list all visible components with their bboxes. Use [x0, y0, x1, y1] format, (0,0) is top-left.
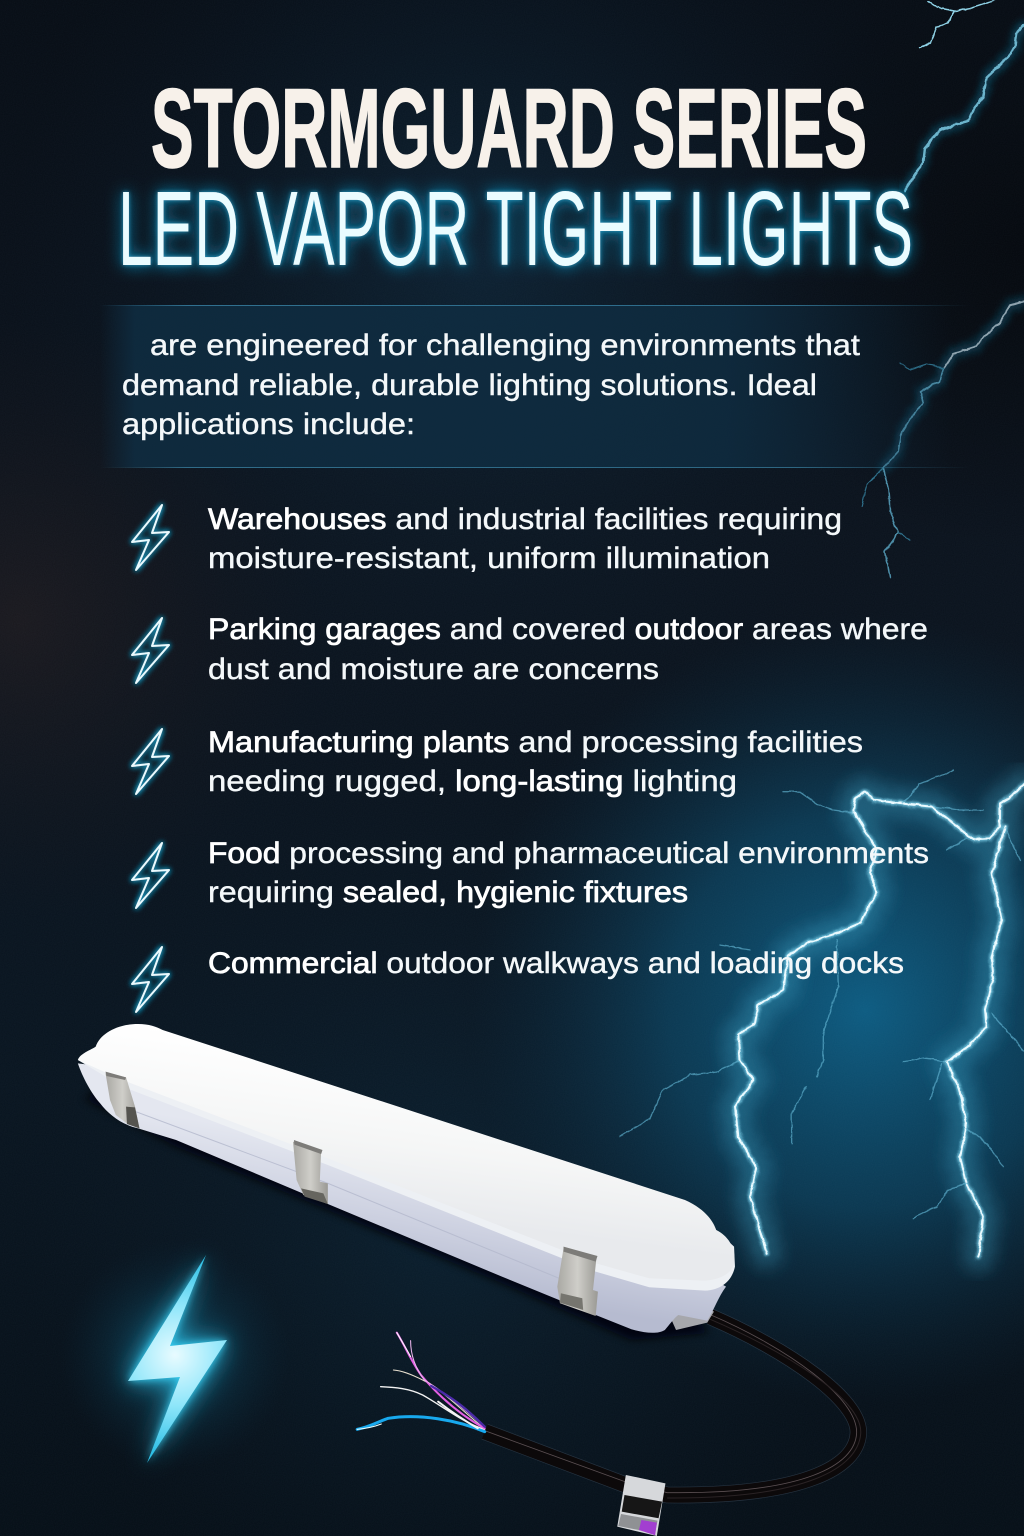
icon: neon bolt: [132, 947, 169, 1012]
item text: [208, 837, 929, 909]
clip: right: [557, 1247, 598, 1316]
housing: [78, 1063, 726, 1333]
item text: Manufacturing plants and processing facilities: [208, 726, 863, 759]
cable label: [617, 1475, 665, 1536]
lightning: middle right: [862, 302, 1024, 577]
clip: left: [106, 1072, 139, 1128]
item text: Warehouses and industrial facilities requiring: [208, 503, 842, 536]
item text: Commercial outdoor walkways and loading docks: [208, 947, 904, 980]
lightning: top right: [905, 0, 1024, 191]
icon: large glowing bolt: [60, 1240, 290, 1470]
item text: [208, 503, 842, 575]
item: parking: [132, 613, 928, 686]
intro text: applications include:: [122, 408, 415, 441]
icon: neon bolt: [132, 618, 169, 683]
item text: Food processing and pharmaceutical environments: [208, 837, 929, 870]
intro text: [122, 329, 861, 441]
lens rim: [78, 1043, 735, 1291]
list: applications: [132, 503, 929, 1012]
item: warehouses: [132, 503, 842, 575]
clip: center: [293, 1140, 328, 1204]
intro text: are engineered for challenging environments that: [150, 329, 861, 362]
icon: neon bolt: [132, 729, 169, 794]
item: manufacturing: [132, 726, 863, 798]
item text: requiring sealed, hygienic fixtures: [208, 876, 688, 909]
rear end bracket: [672, 1307, 714, 1330]
item text: moisture-resistant, uniform illumination: [208, 542, 770, 575]
housing ridge: [136, 1112, 596, 1293]
panel: intro: [100, 305, 970, 468]
cable: [485, 1315, 861, 1498]
cable and wires: [357, 1315, 861, 1536]
product: LED vapor tight light: [78, 1024, 735, 1340]
item text: [208, 613, 928, 686]
icon: neon bolt: [132, 505, 169, 570]
item text: dust and moisture are concerns: [208, 653, 659, 686]
item text: Parking garages and covered outdoor areas where: [208, 613, 928, 646]
intro text: demand reliable, durable lighting solutions. Ideal: [122, 369, 817, 402]
stripped wires: [357, 1333, 485, 1432]
item text: [208, 726, 863, 798]
title: [118, 66, 913, 288]
lightning: large strikes: [620, 770, 1024, 1257]
lens: [78, 1024, 734, 1281]
icon: neon bolt: [132, 843, 169, 908]
item: commercial: [132, 947, 904, 1012]
item: food: [132, 837, 929, 909]
item text: needing rugged, long-lasting lighting: [208, 765, 737, 798]
drop shadow: [87, 1077, 707, 1340]
